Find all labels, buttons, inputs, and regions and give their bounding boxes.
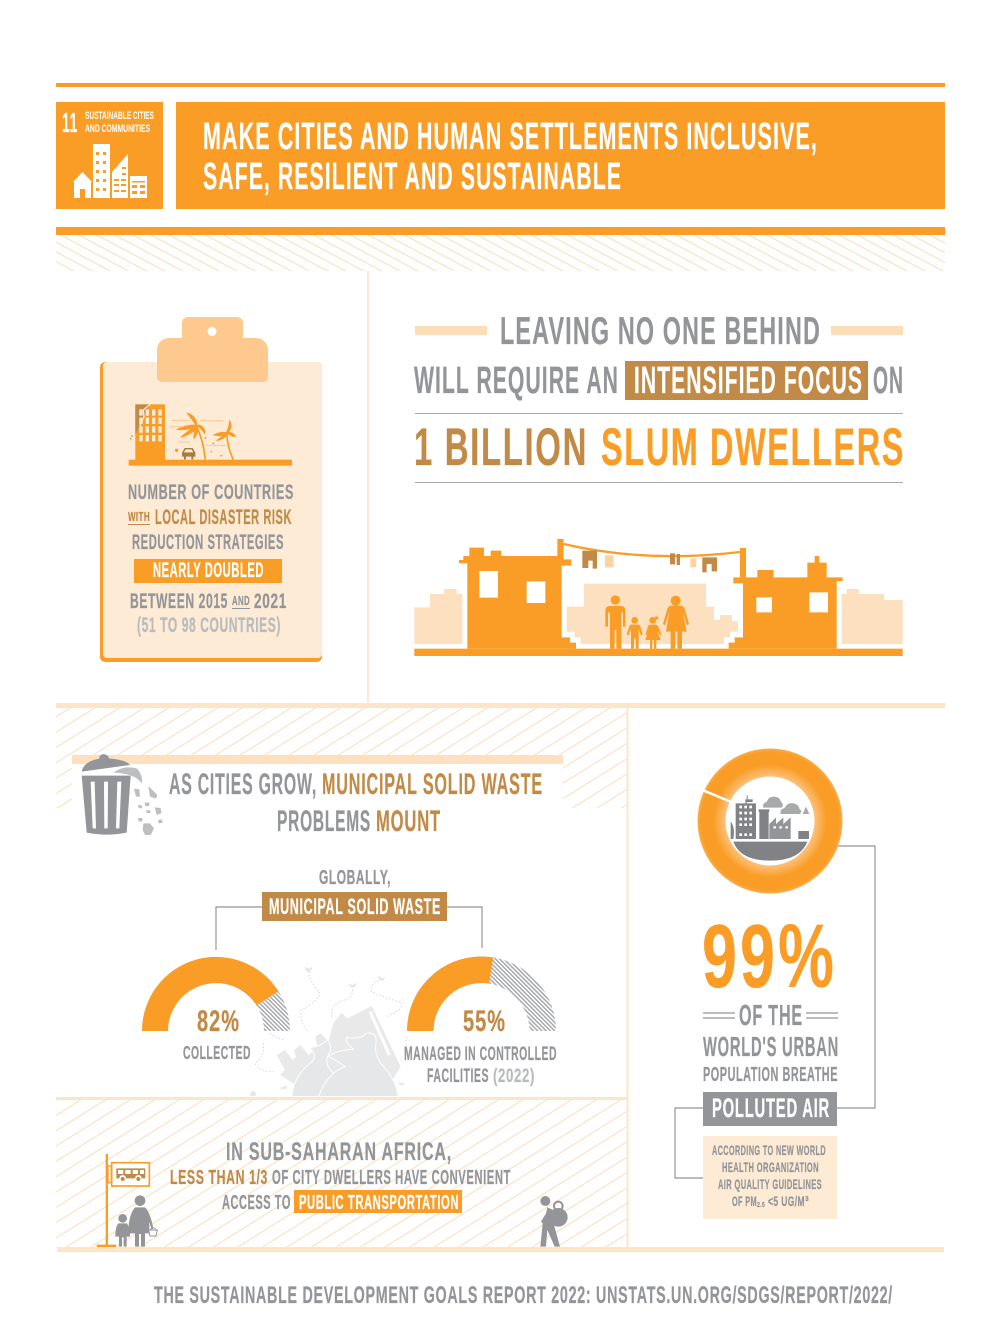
text: public transportation: LESS THAN 1/3 bbox=[170, 1167, 268, 1189]
panel: slum dwellers headline: ON bbox=[873, 360, 904, 402]
text: disaster risk strategies: BETWEEN 2015 bbox=[130, 590, 228, 613]
callout: nearly doubled: NEARLY DOUBLED bbox=[153, 559, 264, 582]
text: public transportation: IN SUB-SAHARAN AFRICA, bbox=[226, 1138, 452, 1166]
icon: walking person with sack bbox=[540, 1196, 568, 1247]
text: public transportation bbox=[170, 1138, 511, 1214]
gauge chart: 55% managed: MANAGED IN CONTROLLED bbox=[404, 1044, 557, 1065]
callout: municipal solid waste: MUNICIPAL SOLID WASTE bbox=[269, 894, 441, 919]
text: disaster risk strategies: NUMBER OF COUNTRIES bbox=[128, 481, 294, 504]
text: disaster risk strategies: WITH bbox=[128, 509, 150, 524]
panel: slum dwellers headline bbox=[414, 310, 905, 483]
text: public transportation: ACCESS TO bbox=[222, 1192, 291, 1214]
text: disaster risk strategies bbox=[128, 481, 294, 637]
goal 11 badge: AND COMMUNITIES bbox=[85, 123, 150, 135]
note: WHO air quality guidelines: HEALTH ORGANIZATION bbox=[722, 1159, 819, 1175]
note: WHO air quality guidelines bbox=[703, 1136, 837, 1219]
heading: municipal solid waste problems: MUNICIPAL SOLID WASTE bbox=[322, 768, 543, 801]
note: WHO air quality guidelines: OF PM bbox=[732, 1193, 757, 1209]
note: WHO air quality guidelines: AIR QUALITY GUIDELINES bbox=[718, 1176, 822, 1192]
statistic: 99% breathe polluted air: OF THE bbox=[739, 1000, 803, 1032]
callout: municipal solid waste bbox=[262, 892, 447, 921]
title banner bbox=[176, 102, 945, 209]
illustration: slum houses and family bbox=[414, 539, 903, 656]
text: disaster risk strategies: 2021 bbox=[254, 590, 287, 613]
text: disaster risk strategies: LOCAL DISASTER RISK bbox=[155, 506, 292, 529]
icon: bus stop with woman and child bbox=[97, 1154, 157, 1247]
gauge chart: 55% managed: FACILITIES bbox=[427, 1066, 489, 1087]
gauge chart: 55% managed bbox=[404, 956, 557, 1087]
note: WHO air quality guidelines: ACCORDING TO NEW WORLD bbox=[712, 1142, 826, 1158]
goal 11 badge: SUSTAINABLE CITIES bbox=[85, 110, 154, 122]
top rule bbox=[56, 83, 945, 87]
panel: disaster risk clipboard bbox=[100, 317, 322, 662]
statistic: 99% breathe polluted air bbox=[702, 907, 839, 1126]
gauge chart: 82% collected: COLLECTED bbox=[183, 1043, 251, 1063]
callout: polluted air: POLLUTED AIR bbox=[712, 1093, 830, 1123]
illustration: storm and damaged building bbox=[129, 404, 292, 466]
goal 11 badge: 11 bbox=[62, 107, 78, 138]
note: WHO air quality guidelines: 2.5 bbox=[757, 1202, 765, 1209]
icon: clipboard clip bbox=[157, 317, 268, 382]
panel: slum dwellers headline: 1 BILLION bbox=[414, 418, 588, 477]
panel: slum dwellers headline: WILL REQUIRE AN bbox=[414, 360, 619, 402]
callout: public transportation bbox=[294, 1190, 462, 1214]
band: municipal waste header bbox=[72, 755, 563, 764]
banner base bar bbox=[56, 227, 945, 235]
text: globally: GLOBALLY, bbox=[319, 867, 391, 889]
statistic: 99% breathe polluted air: WORLD'S URBAN bbox=[703, 1031, 839, 1062]
icon: factory and city bbox=[731, 795, 809, 861]
heading: municipal solid waste problems: AS CITIES GROW, bbox=[169, 768, 317, 801]
callout: nearly doubled bbox=[134, 559, 282, 583]
gauge chart: 82% collected bbox=[142, 957, 290, 1063]
statistic: 99% breathe polluted air: POPULATION BREATHE bbox=[703, 1064, 838, 1086]
connector lines: donut to pollution note bbox=[675, 846, 875, 1178]
gauge chart: 55% managed: (2022) bbox=[493, 1066, 535, 1087]
goal 11 badge bbox=[56, 102, 163, 209]
note: WHO air quality guidelines: 3 bbox=[805, 1196, 809, 1203]
gauge chart: 55% managed: 55% bbox=[463, 1005, 506, 1038]
text: public transportation: OF CITY DWELLERS HAVE CONVENIENT bbox=[272, 1167, 511, 1189]
heading: municipal solid waste problems bbox=[169, 768, 543, 838]
callout: public transportation: PUBLIC TRANSPORTATION bbox=[299, 1192, 459, 1214]
icon: overflowing trash can bbox=[82, 754, 163, 835]
donut chart: 99% urban population bbox=[698, 748, 842, 894]
connector lines: municipal waste to gauges bbox=[216, 907, 482, 950]
text: disaster risk strategies: (51 TO 98 COUNTRIES) bbox=[137, 614, 281, 637]
statistic: 99% breathe polluted air: 99% bbox=[702, 907, 837, 1007]
note: WHO air quality guidelines: <5 UG/M bbox=[768, 1193, 805, 1209]
title banner: SAFE, RESILIENT AND SUSTAINABLE bbox=[203, 156, 622, 198]
callout: intensified focus bbox=[625, 360, 868, 402]
icon: city buildings bbox=[73, 144, 147, 198]
text: disaster risk strategies: REDUCTION STRATEGIES bbox=[132, 531, 284, 554]
gauge chart: 82% collected: 82% bbox=[197, 1005, 240, 1038]
illustration: faded garbage bags bbox=[250, 967, 408, 1097]
text: disaster risk strategies: AND bbox=[232, 593, 250, 608]
heading: municipal solid waste problems: PROBLEMS bbox=[277, 805, 371, 838]
heading: municipal solid waste problems: MOUNT bbox=[376, 805, 441, 838]
callout: polluted air bbox=[703, 1092, 837, 1126]
